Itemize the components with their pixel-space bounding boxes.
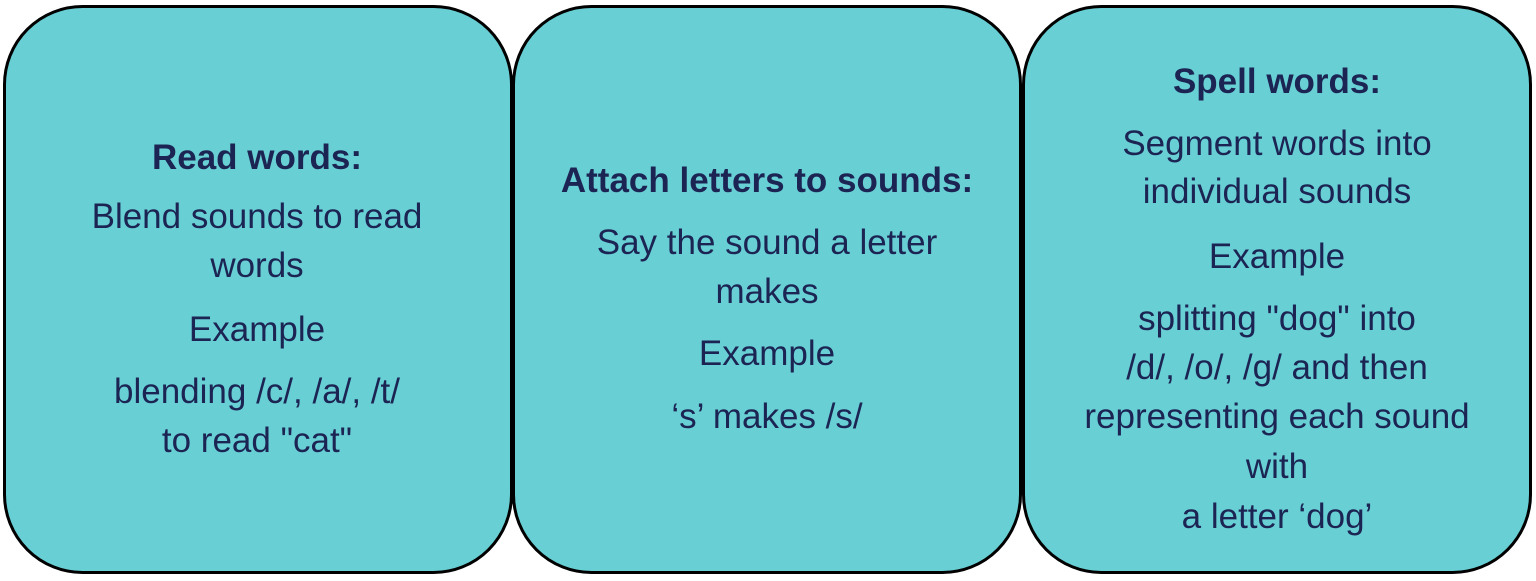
text block: attach letters description: Example — [699, 334, 835, 373]
panel: read words — [4, 6, 512, 572]
text block: attach letters description: Say the sound a letter — [597, 223, 938, 262]
text block: attach letters description: makes — [715, 272, 819, 311]
text block: read words description: Blend sounds to read — [92, 197, 422, 236]
text block: read words description: Example — [189, 310, 325, 349]
text block: spell words description — [1084, 124, 1470, 536]
text block: spell words description: Example — [1209, 237, 1345, 276]
text block: spell words description: a letter ‘dog’ — [1182, 497, 1372, 536]
text block: read words description: to read "cat" — [162, 421, 352, 460]
text block: attach letters description: ‘s’ makes /s/ — [671, 397, 863, 436]
text block: spell words description: splitting "dog" into — [1138, 299, 1416, 338]
heading: read words: Read words: — [152, 138, 362, 177]
text block: read words description — [92, 197, 422, 460]
text block: read words description: blending /c/, /a/, /t/ — [114, 372, 400, 411]
text block: spell words description: individual sounds — [1143, 172, 1411, 211]
text block: attach letters description — [597, 223, 938, 436]
panel: spell words — [1024, 6, 1530, 572]
panel: attach letters — [514, 6, 1020, 572]
heading: spell words: Spell words: — [1173, 62, 1381, 101]
text block: spell words description: representing each sound — [1084, 397, 1470, 436]
text block: spell words description: with — [1245, 447, 1308, 486]
text block: read words description: words — [209, 246, 304, 285]
heading: attach letters: Attach letters to sounds: — [561, 161, 973, 200]
text block: spell words description: Segment words into — [1122, 124, 1432, 163]
text block: spell words description: /d/, /o/, /g/ and then — [1126, 348, 1428, 387]
